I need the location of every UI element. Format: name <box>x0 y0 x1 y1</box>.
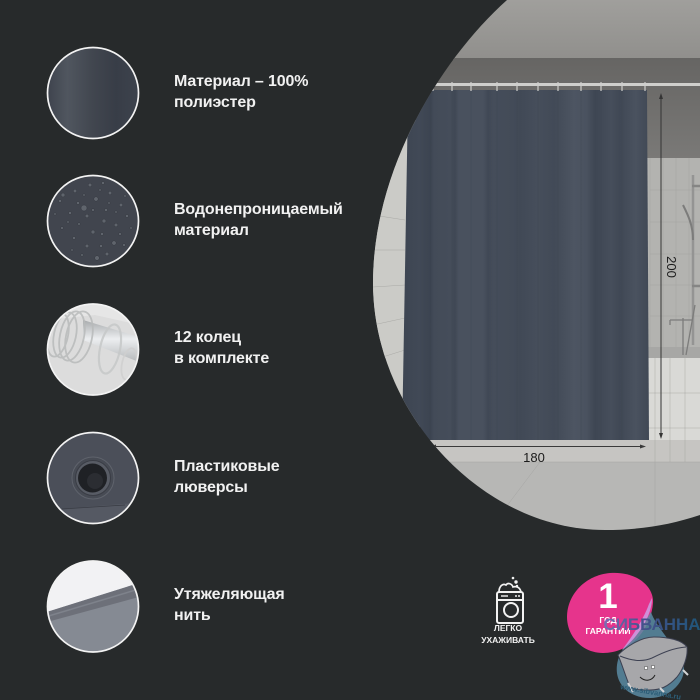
text: material: полиэстер <box>174 94 256 111</box>
shower fixture <box>670 175 700 355</box>
photo circle: fabric <box>47 47 139 139</box>
shower rod <box>433 83 700 86</box>
pink guarantee badge <box>567 573 653 653</box>
text: waterproof: Водонепроницаемый <box>174 201 343 218</box>
photo circle: rings on rod <box>44 303 140 395</box>
text: easy care: УХАЖИВАТЬ <box>481 634 535 644</box>
text: rings: 12 колец <box>174 329 241 346</box>
text: material <box>174 73 308 111</box>
photo circle: plastic grommet <box>47 432 139 524</box>
watermark logo <box>604 598 700 700</box>
photo circle: water drops <box>47 175 139 267</box>
text: rings: в комплекте <box>174 350 269 367</box>
height dimension arrow <box>659 93 676 439</box>
pink guarantee badge: 1 <box>598 577 618 616</box>
text: easy care: ЛЕГКО <box>494 623 522 633</box>
text: material: Материал – 100% <box>174 73 308 90</box>
photo circle: weighted thread <box>47 560 139 653</box>
curtain <box>402 90 649 440</box>
pink guarantee badge: ГАРАНТИИ <box>585 626 631 636</box>
text: easy care <box>481 623 535 644</box>
curtain rings <box>433 82 645 91</box>
room background <box>360 0 700 542</box>
width dimension arrow: 180 <box>523 450 545 465</box>
watermark logo: СИБВАННА <box>604 616 700 634</box>
height dimension arrow: 200 <box>664 256 679 278</box>
text: weighted thread <box>174 586 285 624</box>
pink guarantee badge: ГОД <box>599 615 617 625</box>
text: grommets: люверсы <box>174 479 248 496</box>
width dimension arrow <box>434 444 646 462</box>
icon: washing machine <box>497 577 523 623</box>
text: grommets: Пластиковые <box>174 458 279 475</box>
text: weighted thread: Утяжеляющая <box>174 586 285 603</box>
text: rings <box>174 329 269 367</box>
text: waterproof <box>174 201 343 239</box>
text: weighted thread: нить <box>174 607 211 624</box>
text: grommets <box>174 458 280 496</box>
text: waterproof: материал <box>174 222 249 239</box>
